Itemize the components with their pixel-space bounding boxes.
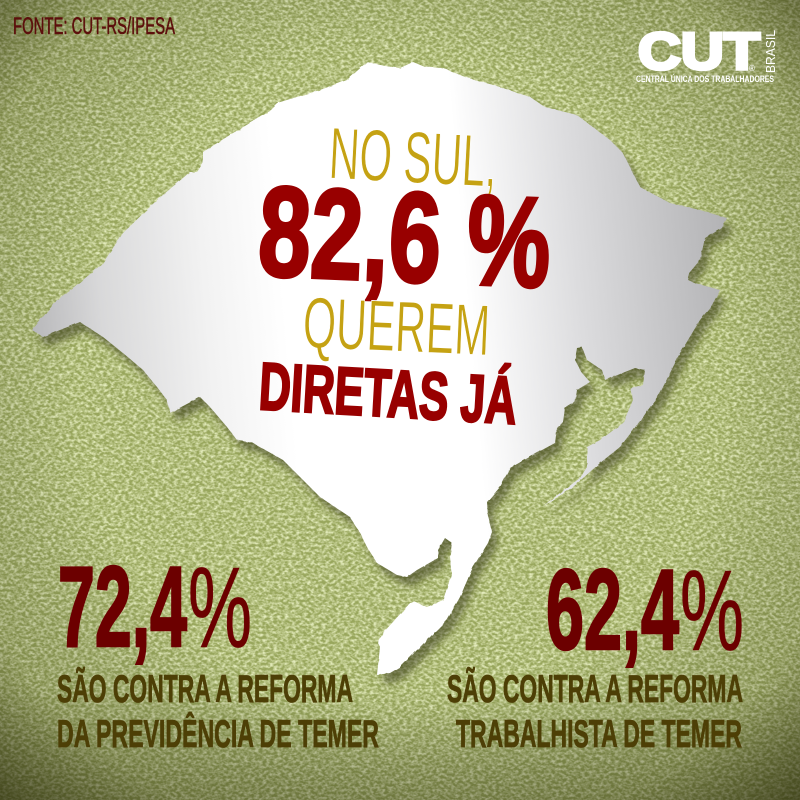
headline figure: 82,6 %: 82,6 % (256, 160, 554, 315)
CUT Brasil logo: ® (749, 64, 755, 73)
headline line: NO SUL: NO SUL, (327, 113, 499, 203)
headline line: DIRETAS JÁ: DIRETAS JÁ (257, 349, 519, 439)
CUT Brasil logo: CUT (638, 23, 760, 81)
figure 72,4%: 72,4 (58, 544, 187, 671)
percent sign, right: % (680, 548, 744, 675)
right statistic: labour reform (447, 547, 744, 756)
percent sign, left: % (188, 545, 252, 672)
headline line: QUEREM: QUEREM (301, 283, 492, 371)
map of Rio Grande do Sul: torn paper with shadow (32, 62, 733, 684)
caption, left (57, 667, 379, 756)
caption, left: DA PREVIDÊNCIA DE TEMER (57, 712, 379, 756)
figure 62,4%: 62,4 (546, 547, 679, 674)
source note: FONTE: CUT-RS/IPESA (13, 13, 175, 40)
CUT Brasil logo: BRASIL (763, 30, 778, 73)
caption, right (447, 667, 743, 756)
left statistic: pension reform (57, 544, 379, 756)
caption, left: SÃO CONTRA A REFORMA (57, 667, 353, 711)
headline (256, 113, 554, 439)
